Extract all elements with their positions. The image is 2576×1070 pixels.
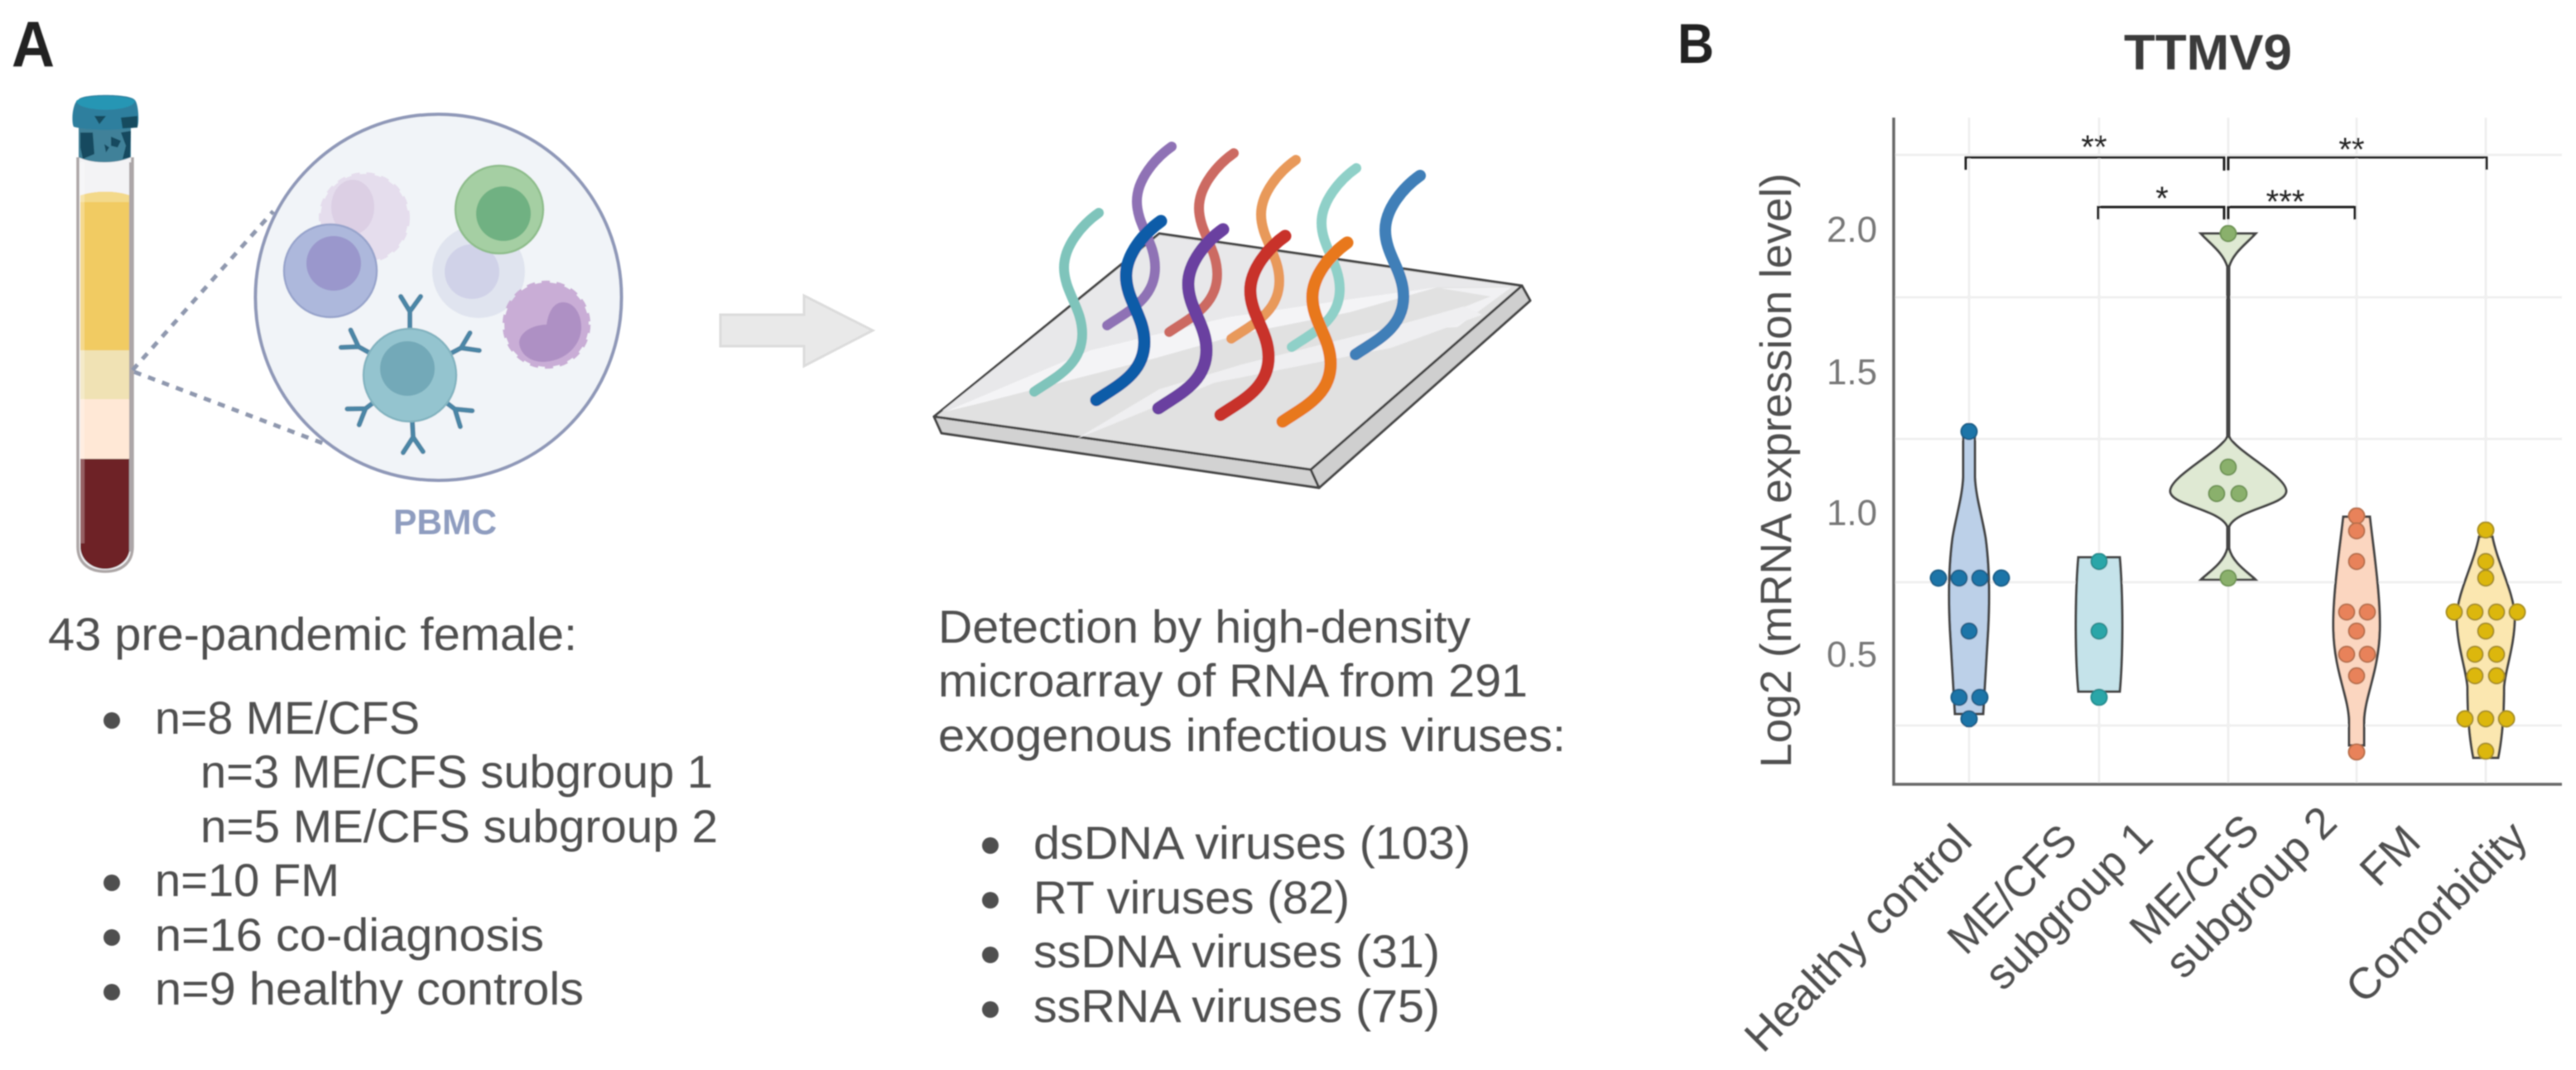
- cell: purple monocyte: [504, 282, 589, 367]
- text block: cohort list: n=9 healthy controls: [155, 962, 584, 1015]
- text block: cohort list: n=5 ME/CFS subgroup 2: [200, 800, 718, 852]
- text block: cohort list: n=8 ME/CFS: [155, 692, 420, 744]
- significance brackets: **: [2081, 129, 2107, 166]
- axes: [1894, 118, 2562, 784]
- arrow: [720, 296, 873, 366]
- y-axis ticks: 1.5: [1827, 352, 1877, 393]
- icon: blood collection tube: [72, 95, 138, 571]
- x-axis category labels: Healthy control: [1736, 816, 1981, 1061]
- y-axis ticks: [1827, 210, 1877, 675]
- text block: microarray description: ssRNA viruses (75): [1033, 980, 1440, 1032]
- text block: microarray description: RT viruses (82): [1033, 871, 1350, 923]
- text block: cohort list: n=16 co-diagnosis: [155, 909, 544, 961]
- icon: microarray slide with RNA strands: [934, 147, 1530, 488]
- text block: microarray description: dsDNA viruses (103): [1033, 817, 1471, 869]
- violin: ME/CFS subgroup 2: [2170, 225, 2286, 586]
- cell: pale lymphocyte: [432, 225, 525, 318]
- x-axis category labels: ME/CFS: [1938, 816, 2087, 963]
- text block: microarray description: exogenous infectious viruses:: [938, 709, 1566, 761]
- text block: cohort list: [48, 608, 718, 1015]
- slide: [934, 234, 1530, 488]
- dashed zoom lines: [132, 211, 325, 444]
- y-axis ticks: 2.0: [1827, 210, 1877, 250]
- significance brackets: ***: [2266, 184, 2304, 220]
- violin: comorbidity: [2446, 522, 2525, 759]
- text block: cohort list: n=10 FM: [155, 854, 339, 906]
- chart title: TTMV9: [2124, 25, 2292, 80]
- x-axis category labels: FM: [2351, 817, 2430, 895]
- cell: green lymphocyte: [455, 166, 543, 253]
- cell: blue lymphocyte: [284, 224, 377, 317]
- significance brackets: *: [2155, 181, 2169, 217]
- text block: microarray description: [938, 600, 1566, 1032]
- RNA strands: front row: [1096, 221, 1347, 422]
- text block: microarray description: ssDNA viruses (31): [1033, 925, 1440, 977]
- panel label A: A: [12, 7, 55, 80]
- violin chart: [1736, 118, 2562, 1061]
- text block: microarray description: Detection by high-density: [938, 600, 1471, 653]
- panel label B: B: [1678, 12, 1714, 75]
- x-axis category labels: subgroup 2: [2156, 798, 2347, 987]
- violin: FM: [2333, 508, 2380, 760]
- x-axis category labels: [1736, 798, 2537, 1061]
- x-axis category labels: subgroup 1: [1976, 812, 2162, 999]
- significance brackets: **: [2338, 132, 2365, 168]
- text block: cohort list: 43 pre-pandemic female:: [48, 608, 577, 660]
- y-axis ticks: 0.5: [1827, 634, 1877, 675]
- PBMC label: PBMC: [393, 503, 497, 542]
- y-axis title: Log2 (mRNA expression level): [1752, 173, 1801, 768]
- y-axis ticks: 1.0: [1827, 493, 1877, 533]
- text block: cohort list: n=3 ME/CFS subgroup 1: [200, 745, 713, 798]
- RNA strands: back row: [1034, 147, 1420, 392]
- significance brackets: [1966, 129, 2487, 220]
- x-axis category labels: ME/CFS: [2121, 806, 2269, 953]
- cell: faded spiky: [320, 174, 408, 262]
- panel: PBMC circle: [255, 114, 621, 480]
- x-axis category labels: Comorbidity: [2337, 812, 2537, 1012]
- text block: microarray description: microarray of RNA from 291: [938, 654, 1528, 706]
- cell: B cell with antibodies: [341, 296, 479, 453]
- violin: ME/CFS subgroup 1: [2076, 553, 2122, 706]
- violin: healthy control: [1931, 424, 2009, 727]
